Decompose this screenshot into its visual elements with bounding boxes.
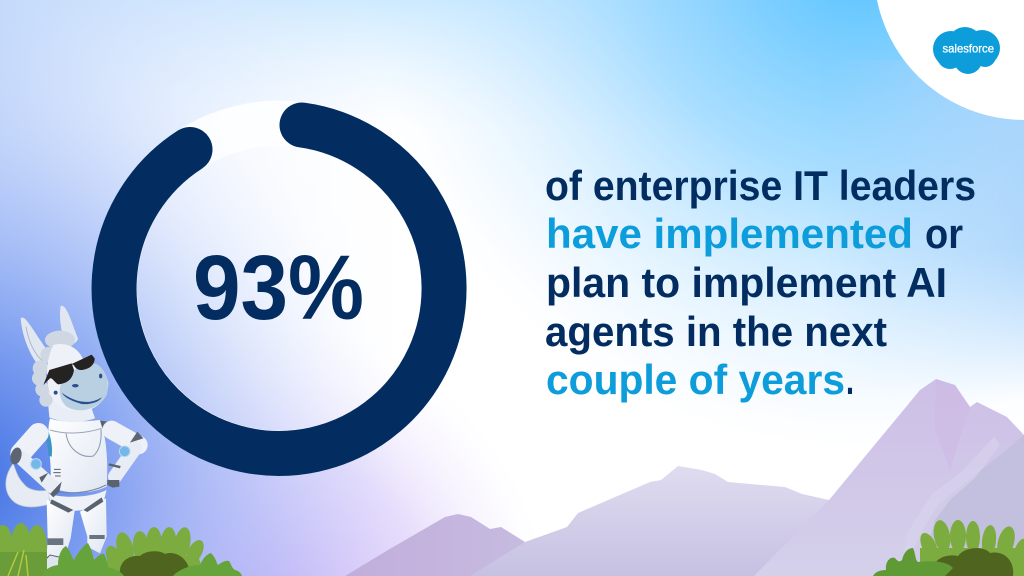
front foliage right xyxy=(173,553,242,576)
text block: statement: or xyxy=(925,210,963,257)
right arm xyxy=(112,430,138,477)
inner circle xyxy=(136,145,422,431)
progress arc xyxy=(114,125,444,453)
front foliage xyxy=(873,548,953,576)
text block: statement: couple of years xyxy=(546,356,845,403)
pelvis xyxy=(48,490,107,511)
icon: salesforce logo xyxy=(933,27,1000,74)
legs xyxy=(47,500,75,557)
text block: statement: agents in the next xyxy=(545,308,887,355)
left arm xyxy=(21,433,53,487)
bush: centre xyxy=(42,526,242,576)
neck xyxy=(47,387,95,422)
torso xyxy=(48,418,107,493)
mascot: robot donkey with sunglasses xyxy=(6,306,143,576)
dark mound xyxy=(120,551,190,576)
big number: 93% xyxy=(193,237,364,339)
bush: left xyxy=(0,523,47,576)
text block: statement: plan to implement AI xyxy=(546,259,947,306)
icon: salesforce logo: salesforce xyxy=(942,42,994,56)
text block: statement: have implemented xyxy=(546,210,913,257)
head xyxy=(47,344,108,411)
sunglasses xyxy=(43,355,95,385)
tail xyxy=(6,463,50,507)
text block: statement: of enterprise IT leaders xyxy=(545,162,976,209)
track gap xyxy=(114,123,444,453)
text block: statement xyxy=(545,162,976,403)
chart: donut 93% xyxy=(114,123,444,453)
bush: right xyxy=(873,519,1024,576)
front foliage left xyxy=(42,543,124,576)
mane xyxy=(32,331,75,407)
ears xyxy=(21,318,49,367)
snout xyxy=(60,363,108,410)
dark mound xyxy=(932,548,1013,576)
mountains xyxy=(345,379,1024,576)
text block: statement: . xyxy=(846,356,854,403)
panel: white logo corner xyxy=(877,0,1024,120)
